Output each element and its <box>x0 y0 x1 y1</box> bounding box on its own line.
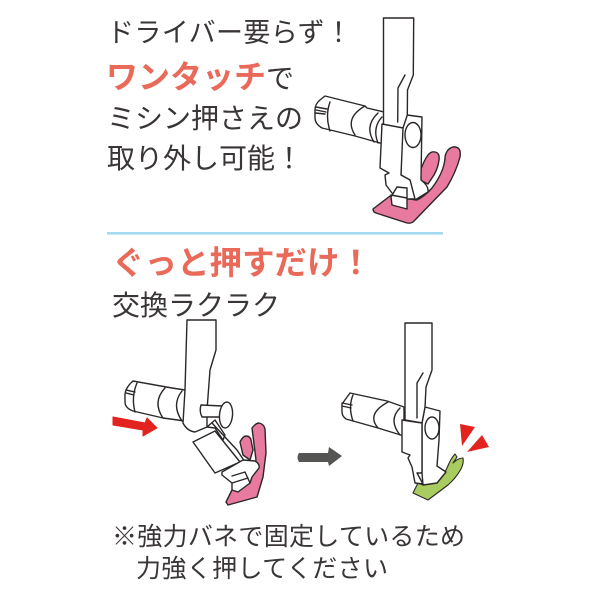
heading: driver not needed: 取り外し可能！ <box>107 143 303 174</box>
divider line <box>107 232 443 235</box>
foot <box>226 423 266 505</box>
holder plate <box>193 431 240 473</box>
ankle and right plate <box>401 115 428 200</box>
icon: red snap marks <box>460 424 489 452</box>
screw <box>342 393 404 436</box>
note text <box>112 523 465 583</box>
heading: driver not needed: ワンタッチで <box>106 59 294 95</box>
foot sole <box>373 147 460 223</box>
clamp block <box>380 124 415 199</box>
second toe <box>420 152 439 184</box>
shaft <box>384 18 414 128</box>
heading: driver not needed <box>106 18 352 174</box>
right plate <box>422 407 446 485</box>
heading: driver not needed: ミシン押さえの <box>107 103 303 134</box>
illustration: presser foot attached <box>315 18 460 223</box>
shaft <box>405 323 432 423</box>
clamp block <box>402 420 423 484</box>
note text: 力強く押してください <box>136 555 388 583</box>
holder top <box>207 420 225 440</box>
note text: ※強力バネで固定しているため <box>112 523 465 551</box>
arrow: press direction <box>113 417 157 436</box>
illustration: pressing release pin <box>125 320 266 505</box>
heading: just press: ぐっと押すだけ！ <box>112 245 372 281</box>
foot <box>413 454 463 500</box>
shaft <box>183 320 216 432</box>
screw <box>125 381 185 421</box>
thumb screw <box>315 96 384 145</box>
cube and clip <box>222 460 259 492</box>
subheading: 交換ラクラク <box>112 290 280 321</box>
pin <box>200 405 223 417</box>
second toe <box>240 436 253 460</box>
heading: driver not needed: ドライバー要らず！ <box>107 18 352 48</box>
illustration: foot attached <box>342 323 463 500</box>
arrow: next step <box>298 447 342 466</box>
cube <box>391 187 407 209</box>
